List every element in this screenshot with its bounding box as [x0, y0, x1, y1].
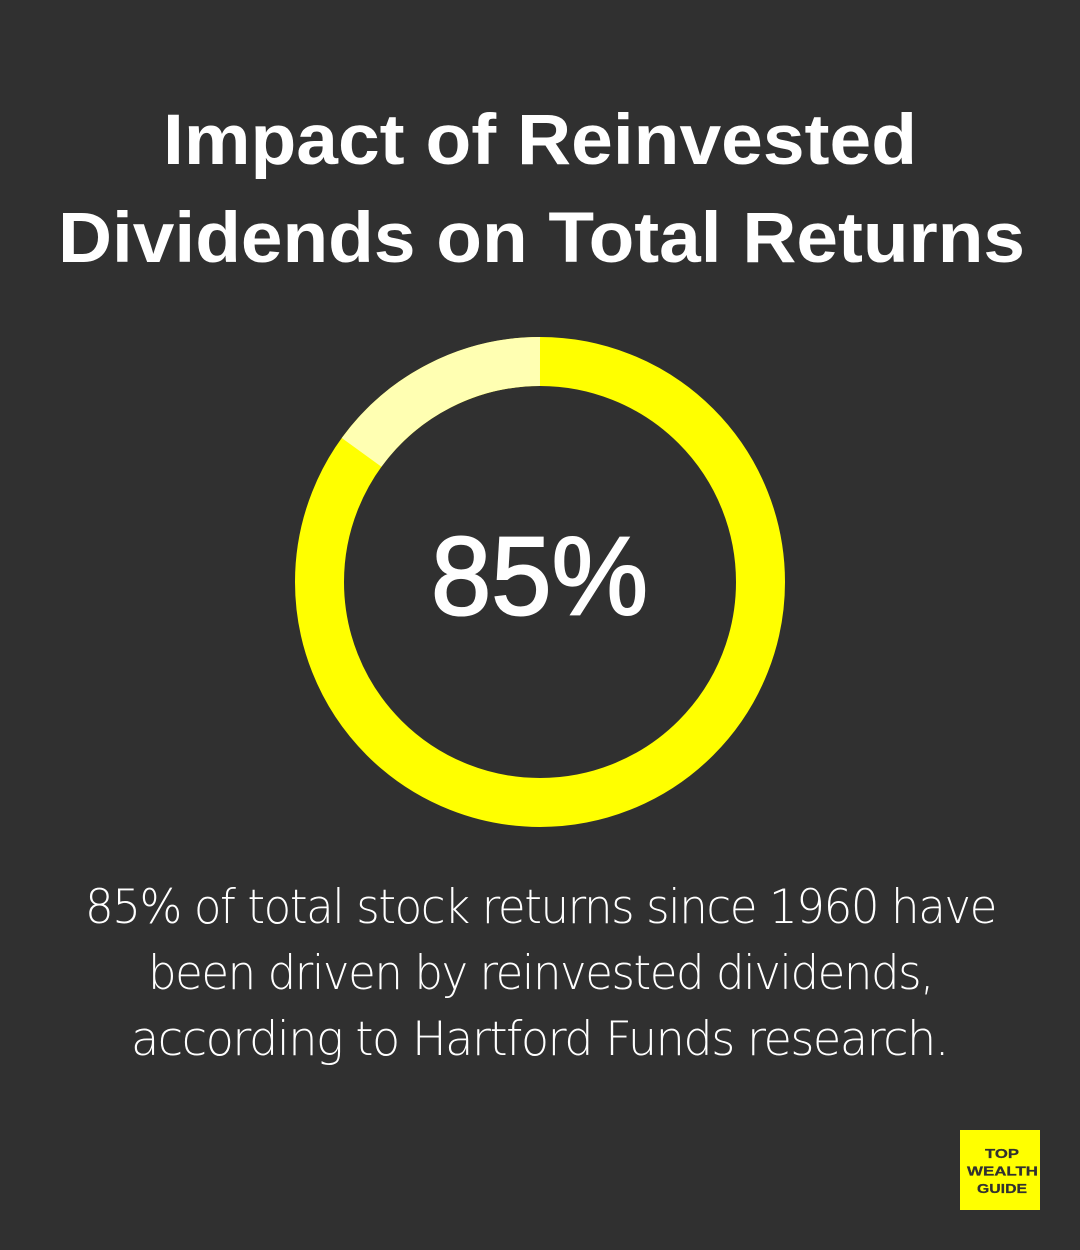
center value: 85%: [431, 514, 648, 638]
donut segment: remaining 15%: [362, 362, 540, 452]
title: [58, 101, 1025, 278]
donut chart: [320, 362, 760, 802]
logo text: WEALTH: [967, 1164, 1038, 1178]
donut segment: 85%: [320, 362, 760, 802]
description text: [85, 880, 996, 1067]
title: Dividends on Total Returns: [58, 199, 1025, 278]
title: Impact of Reinvested: [163, 101, 917, 180]
logo text: [967, 1147, 1038, 1196]
logo text: GUIDE: [977, 1182, 1027, 1196]
logo text: TOP: [985, 1147, 1019, 1161]
description text: been driven by reinvested dividends,: [148, 946, 933, 1001]
description text: according to Hartford Funds research.: [131, 1012, 948, 1067]
description text: 85% of total stock returns since 1960 have: [85, 880, 996, 935]
logo badge: [960, 1130, 1040, 1210]
